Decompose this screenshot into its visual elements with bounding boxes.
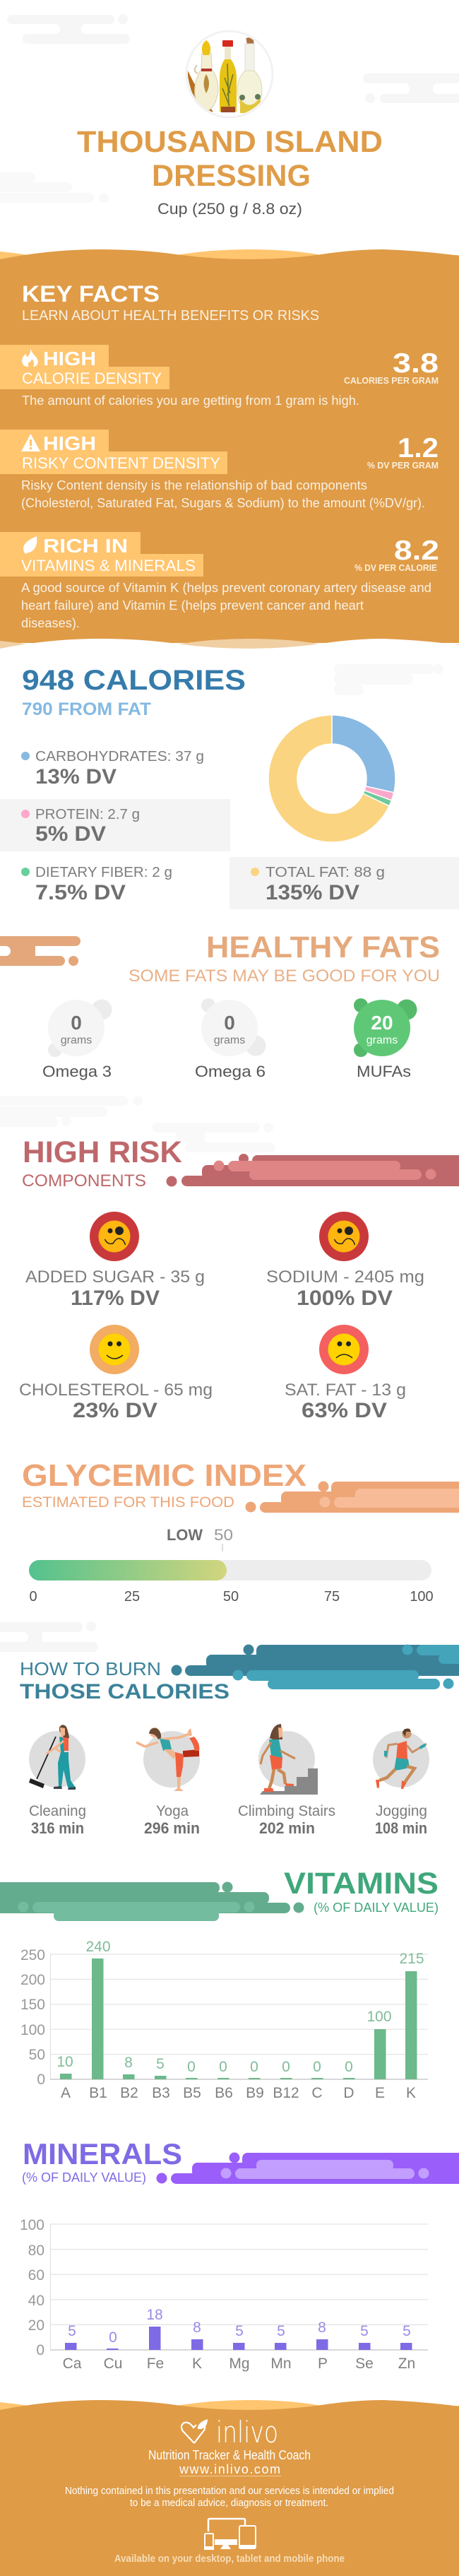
bar chart: vitamins: 50 — [29, 2047, 45, 2063]
bar chart: minerals: Se — [355, 2356, 374, 2372]
disclaimer: Nothing contained in this presentation and our services is intended or implied — [65, 2486, 394, 2497]
stat: omega 6: grams — [214, 1034, 245, 1046]
panel: footer — [0, 2400, 459, 2576]
bar chart: minerals: 5 — [68, 2323, 76, 2339]
subheading: (% OF DAILY VALUE) — [22, 2170, 146, 2185]
bar chart: vitamins: 100 — [366, 2009, 392, 2025]
figure: jogging — [376, 1729, 427, 1789]
item: sodium: SODIUM - 2405 mg — [266, 1268, 424, 1287]
legend: dietary fiber: DIETARY FIBER: 2 g — [35, 865, 172, 880]
bar chart: vitamins: B12 — [273, 2085, 299, 2101]
heading: minerals: MINERALS — [23, 2137, 182, 2170]
bar chart: vitamins: B5 — [183, 2085, 201, 2101]
activity: jogging: 108 min — [375, 1819, 427, 1837]
fact: rich in vitamins — [0, 532, 439, 630]
bar chart: vitamins: 0 — [187, 2059, 196, 2075]
decorative band — [171, 1645, 459, 1689]
icon: flame — [22, 348, 38, 367]
legend: dietary fiber — [21, 865, 172, 904]
legend: dietary fiber: 7.5% DV — [35, 881, 126, 904]
activity: jogging — [373, 1729, 429, 1837]
fact: rich in vitamins: RICH IN — [43, 535, 128, 557]
bar chart: vitamins: 0 — [219, 2059, 227, 2075]
activity: climbing stairs: Climbing Stairs — [238, 1803, 335, 1819]
bar chart: vitamins: 0 — [37, 2072, 45, 2088]
bar chart: minerals: 80 — [28, 2243, 44, 2259]
fact: calorie density: The amount of calories you are getting from 1 gram is high. — [22, 394, 359, 408]
legend: carbohydrates — [21, 749, 204, 788]
panel: glycemic index — [22, 1458, 459, 1605]
fact: calorie density: CALORIE DENSITY — [22, 370, 162, 387]
marker label — [167, 1526, 233, 1552]
fact: risky content density: % DV PER GRAM — [367, 460, 439, 471]
bar chart: vitamins — [20, 1939, 428, 2101]
row bg: protein — [0, 799, 230, 851]
bar chart: minerals: 5 — [277, 2323, 285, 2339]
fact: rich in vitamins: % DV PER CALORIE — [354, 562, 437, 573]
item: saturated fat: 63% DV — [302, 1399, 387, 1422]
legend: total fat: 135% DV — [266, 881, 359, 904]
subheading: LEARN ABOUT HEALTH BENEFITS OR RISKS — [22, 308, 319, 324]
fact: rich in vitamins: A good source of Vitamin K (helps prevent coronary artery disease and — [21, 581, 431, 595]
bar chart: minerals: 18 — [146, 2307, 163, 2323]
activity: yoga — [136, 1727, 200, 1837]
bar chart: vitamins: B2 — [120, 2085, 138, 2101]
item: sodium: 100% DV — [297, 1287, 393, 1310]
bar chart: vitamins: 100 — [20, 2022, 45, 2038]
bar chart: vitamins: K — [406, 2085, 416, 2101]
bar chart: minerals: 0 — [109, 2329, 117, 2346]
legend: total fat: TOTAL FAT: 88 g — [266, 865, 385, 880]
legend: protein — [21, 807, 140, 846]
legend: carbohydrates: 13% DV — [35, 765, 117, 788]
item: cholesterol — [19, 1325, 213, 1422]
item: added sugar: 117% DV — [71, 1287, 160, 1310]
heading: key facts: KEY FACTS — [22, 281, 160, 307]
item: cholesterol: CHOLESTEROL - 65 mg — [19, 1381, 213, 1400]
activity: jogging: Jogging — [376, 1803, 427, 1819]
subheading: SOME FATS MAY BE GOOD FOR YOU — [129, 967, 440, 986]
heading: glycemic index: GLYCEMIC INDEX — [22, 1458, 306, 1493]
background clouds: mid — [0, 1096, 275, 1152]
item: saturated fat: SAT. FAT - 13 g — [285, 1381, 406, 1400]
fact: risky content density — [0, 430, 439, 510]
panel: minerals — [20, 2137, 459, 2372]
icon: leaf — [23, 536, 37, 554]
bar chart: minerals: Zn — [398, 2356, 415, 2372]
bar chart: minerals: 5 — [403, 2323, 411, 2339]
background clouds: header — [0, 14, 459, 203]
panel: vitamins — [0, 1867, 439, 2101]
heading: healthy fats: HEALTHY FATS — [206, 930, 440, 964]
bar chart: minerals: 0 — [36, 2342, 44, 2358]
subheading: COMPONENTS — [22, 1171, 146, 1190]
stat: MUFAs: MUFAs — [357, 1063, 411, 1080]
bar chart: minerals: 8 — [193, 2320, 201, 2336]
legend: protein: PROTEIN: 2.7 g — [35, 807, 140, 822]
disclaimer: to be a medical advice, diagnosis or treatment. — [130, 2498, 328, 2509]
figure: yoga — [136, 1727, 199, 1791]
bar chart: minerals: Mn — [270, 2356, 292, 2372]
panel: key facts — [0, 249, 459, 654]
heading: high risk: HIGH RISK — [23, 1135, 182, 1169]
serving size: Cup (250 g / 8.8 oz) — [157, 200, 302, 218]
bottom wave of key facts — [0, 639, 459, 654]
bar chart: vitamins: B6 — [215, 2085, 233, 2101]
bar chart: minerals: 100 — [20, 2217, 44, 2233]
gauge scale: 25 — [124, 1589, 140, 1605]
gauge scale: 100 — [410, 1589, 434, 1605]
bar chart: vitamins: B9 — [246, 2085, 264, 2101]
availability note: Available on your desktop, tablet and mobile phone — [114, 2553, 345, 2565]
panel: high risk — [19, 1135, 459, 1422]
fact: risky content density: Risky Content density is the relationship of bad components — [21, 478, 367, 492]
bar chart: vitamins: B3 — [152, 2085, 170, 2101]
logo: inlivo — [181, 2415, 278, 2450]
fact: rich in vitamins: heart failure) and Vitamin E (helps prevent cancer and heart — [21, 598, 364, 613]
fact: calorie density — [0, 345, 439, 408]
figure: cleaning — [29, 1725, 76, 1790]
title — [77, 125, 383, 193]
disclaimer — [65, 2486, 394, 2509]
activity: climbing stairs — [238, 1724, 335, 1837]
bar chart: minerals — [20, 2217, 428, 2372]
bar chart: vitamins: E — [375, 2085, 385, 2101]
fact: risky content density: RISKY CONTENT DENSITY — [22, 454, 220, 472]
item: saturated fat — [285, 1325, 406, 1422]
bar chart: minerals: K — [192, 2356, 202, 2372]
subheading: (% OF DAILY VALUE) — [314, 1901, 439, 1915]
marker label: LOW — [167, 1526, 203, 1544]
stat: omega 3: 0 — [71, 1012, 82, 1034]
title: DRESSING — [152, 159, 311, 193]
background cloud: burn — [0, 1621, 98, 1652]
donut chart — [268, 715, 395, 842]
fact: rich in vitamins: 8.2 — [394, 536, 439, 566]
activity: cleaning: 316 min — [31, 1819, 84, 1837]
fact: calorie density: 3.8 — [393, 348, 439, 379]
bar chart: minerals: 8 — [318, 2320, 326, 2336]
icon: warning triangle — [21, 434, 40, 451]
stat: MUFAs: grams — [366, 1034, 398, 1046]
bar chart: vitamins: 10 — [56, 2054, 73, 2070]
decorative band — [0, 1882, 304, 1921]
heading: those calories: THOSE CALORIES — [20, 1680, 230, 1703]
tagline: Nutrition Tracker & Health Coach — [148, 2448, 311, 2462]
stat: omega 6: Omega 6 — [195, 1063, 266, 1080]
panel: calories — [0, 664, 459, 909]
row bg: total fat — [230, 857, 459, 909]
bar chart: vitamins: 0 — [345, 2059, 353, 2075]
stat: omega 3: grams — [61, 1034, 92, 1046]
bar chart: vitamins: C — [311, 2085, 323, 2101]
stat: MUFAs — [354, 998, 417, 1080]
heading: calories: 948 CALORIES — [22, 665, 246, 696]
fact: calorie density: CALORIES PER GRAM — [344, 375, 439, 386]
fact: risky content density: (Cholesterol, Saturated Fat, Sugars & Sodium) to the amount (%DV/gr). — [21, 496, 425, 510]
decorative band — [157, 2152, 459, 2184]
item: added sugar — [25, 1212, 205, 1310]
decorative band — [167, 1154, 459, 1187]
bar chart: vitamins: 150 — [20, 1997, 45, 2013]
bar chart: minerals: 5 — [235, 2323, 244, 2339]
activity: climbing stairs: 202 min — [259, 1819, 315, 1837]
bar chart: vitamins: 200 — [20, 1972, 45, 1988]
bar chart: vitamins: 5 — [156, 2056, 165, 2072]
legend: protein: 5% DV — [35, 822, 106, 846]
bar chart: vitamins: 215 — [399, 1951, 424, 1967]
stat: omega 3 — [42, 999, 112, 1080]
food photo: oil bottles — [186, 31, 273, 117]
gauge bar — [29, 1560, 431, 1581]
stat: omega 6: 0 — [224, 1012, 235, 1034]
figure: climbing stairs — [260, 1724, 318, 1795]
bar chart: vitamins: 0 — [313, 2059, 321, 2075]
fact: rich in vitamins: diseases). — [21, 616, 80, 630]
fact: risky content density: HIGH — [43, 432, 96, 454]
heading: vitamins: VITAMINS — [284, 1867, 439, 1901]
gauge scale — [29, 1589, 434, 1605]
subheading: ESTIMATED FOR THIS FOOD — [22, 1494, 234, 1511]
item: sodium — [266, 1212, 424, 1310]
bar chart: minerals: Ca — [63, 2356, 82, 2372]
logo: inlivo: inlivo — [216, 2415, 278, 2450]
bar chart: vitamins: 250 — [20, 1947, 45, 1963]
bar chart: minerals: 40 — [28, 2293, 44, 2309]
activity: cleaning: Cleaning — [29, 1803, 86, 1819]
title: THOUSAND ISLAND — [77, 125, 383, 159]
fact: rich in vitamins: VITAMINS & MINERALS — [21, 557, 196, 574]
gauge scale: 50 — [223, 1589, 239, 1605]
bar chart: minerals: P — [318, 2356, 328, 2372]
stat: omega 3: Omega 3 — [42, 1063, 112, 1080]
bar chart: minerals: 60 — [28, 2267, 44, 2283]
panel: healthy fats — [0, 930, 440, 1080]
background cloud — [334, 664, 443, 695]
heading: how to burn: HOW TO BURN — [20, 1658, 161, 1679]
decorative band — [0, 936, 81, 966]
bar chart: vitamins: 0 — [250, 2059, 258, 2075]
stat: omega 6 — [195, 998, 266, 1080]
bar chart: minerals: 20 — [28, 2317, 44, 2334]
decorative band — [246, 1481, 459, 1513]
item: cholesterol: 23% DV — [73, 1399, 157, 1422]
website link: www.inlivo.com — [179, 2462, 280, 2476]
activity: yoga: 296 min — [144, 1819, 200, 1837]
legend: total fat — [251, 865, 385, 904]
activity: cleaning — [29, 1725, 86, 1837]
activity: yoga: Yoga — [156, 1803, 189, 1819]
bar chart: vitamins: 240 — [85, 1939, 111, 1955]
bar chart: vitamins: A — [61, 2085, 71, 2101]
subheading: from fat: 790 FROM FAT — [22, 699, 151, 719]
fact: calorie density: HIGH — [43, 348, 96, 370]
item: added sugar: ADDED SUGAR - 35 g — [25, 1268, 205, 1287]
bar chart: minerals: Cu — [104, 2356, 122, 2372]
bar chart: vitamins: D — [343, 2085, 354, 2101]
legend: carbohydrates: CARBOHYDRATES: 37 g — [35, 749, 204, 764]
bar chart: vitamins: B1 — [89, 2085, 107, 2101]
bar chart: minerals: Fe — [147, 2356, 164, 2372]
bar chart: minerals: Mg — [229, 2356, 250, 2372]
bar chart: vitamins: 8 — [124, 2055, 133, 2071]
stat: MUFAs: 20 — [371, 1012, 393, 1034]
bar chart: vitamins: 0 — [282, 2059, 290, 2075]
fact: risky content density: 1.2 — [398, 433, 439, 463]
gauge scale: 75 — [324, 1589, 340, 1605]
bar chart: minerals: 5 — [360, 2323, 369, 2339]
gauge scale: 0 — [29, 1589, 37, 1605]
panel: how to burn — [20, 1645, 459, 1837]
icon: devices — [204, 2519, 256, 2550]
marker label: 50 — [214, 1526, 233, 1544]
